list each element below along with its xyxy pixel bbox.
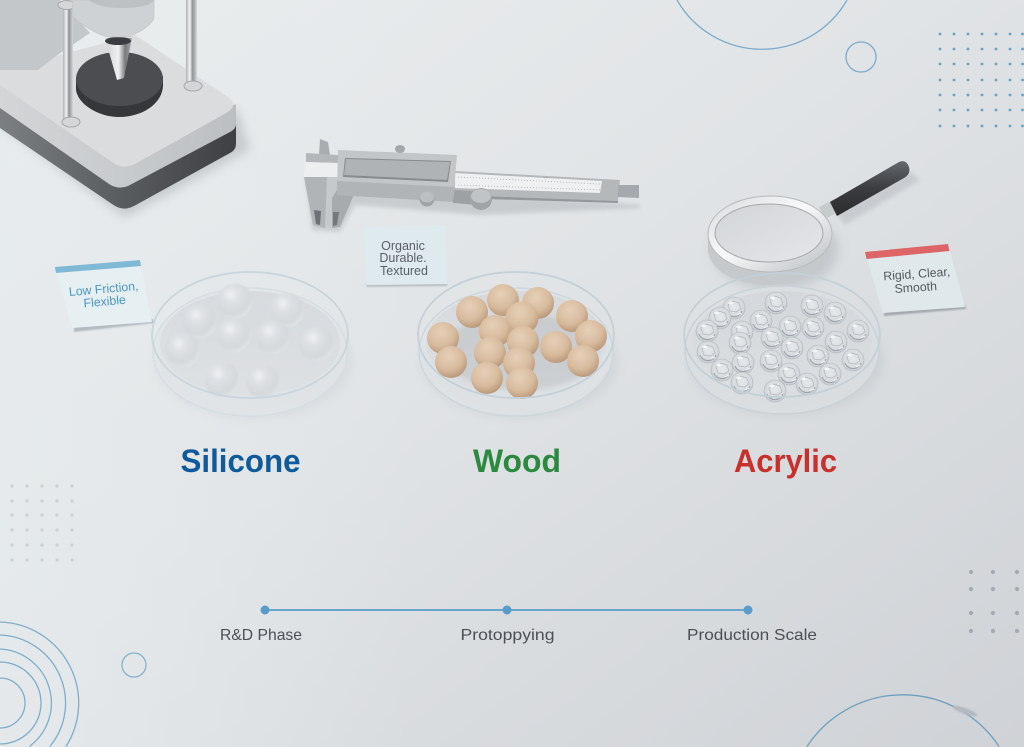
dish wall	[419, 288, 613, 416]
icon: digital caliper	[304, 139, 640, 232]
note text: Rigid, Clear,	[883, 265, 951, 283]
note text: wood traits: Durable.	[379, 251, 427, 265]
note text second line: Smooth	[894, 279, 938, 296]
dish floor	[692, 291, 872, 395]
acrylic beads	[696, 292, 869, 402]
timeline label: Production Scale: Production Scale	[687, 627, 817, 644]
note text second line: Flexible	[83, 293, 127, 310]
caliper body	[337, 150, 457, 202]
note text: wood traits: Organic	[381, 239, 425, 253]
note text: Low Friction,	[68, 279, 139, 299]
press disc	[76, 52, 163, 117]
timeline label: R&D Phase: R&D Phase	[220, 627, 302, 644]
panel: acrylic dish	[684, 273, 884, 416]
press base light side	[0, 85, 236, 188]
panel: wood dish	[418, 272, 618, 418]
dish rim	[418, 272, 614, 398]
decorative circle: small bottom left	[122, 653, 146, 677]
wood bead shadows	[442, 314, 598, 390]
heading: Wood: Wood	[473, 443, 561, 479]
dish floor	[426, 291, 606, 395]
caliper knobs	[395, 145, 492, 210]
heading: Acrylic: Acrylic	[734, 443, 837, 479]
timeline node: prototyping	[502, 606, 512, 614]
dish wall	[153, 288, 347, 416]
press cone	[105, 37, 132, 80]
timeline	[220, 606, 817, 644]
caliper rule	[453, 171, 639, 203]
concentric circles: bottom left	[0, 622, 79, 746]
panel: silicone dish	[152, 272, 352, 418]
timeline label: Protoppying: Protoppying	[460, 627, 554, 644]
dish floor	[160, 291, 340, 395]
press poles	[58, 0, 202, 127]
timeline line	[265, 609, 748, 611]
note: silicone	[55, 260, 154, 332]
note: acrylic	[865, 244, 966, 316]
dish rim	[684, 273, 880, 397]
wood beads	[427, 284, 607, 399]
dish rim	[152, 272, 348, 398]
heading: Silicone: Silicone	[180, 443, 300, 479]
press base dark layer	[0, 106, 236, 209]
note: wood	[364, 225, 447, 287]
magnifying glass	[708, 161, 920, 290]
note stripe: red	[865, 244, 950, 259]
caliper rail	[453, 190, 490, 206]
decorative circle: top arc	[677, 0, 847, 49]
timeline node: production	[744, 606, 752, 614]
note stripe: blue	[55, 260, 141, 273]
dot grid: top right	[939, 33, 1024, 127]
note text: wood traits: Textured	[380, 264, 428, 278]
dot grid: bottom right	[969, 570, 1019, 633]
dot grid: left	[10, 484, 74, 562]
caliper display	[343, 158, 451, 182]
decorative circle: small top	[846, 42, 876, 72]
magnifier ring	[708, 196, 832, 285]
decorative arc: bottom right	[807, 695, 999, 746]
silicone beads	[166, 284, 334, 399]
icon: testing press machine	[0, 0, 250, 218]
timeline node: R&D	[260, 606, 270, 614]
caliper fixed jaw	[304, 139, 356, 228]
magnifier handle	[819, 161, 909, 219]
press rear block	[0, 0, 90, 70]
dish wall	[685, 286, 879, 414]
press base top surface	[0, 35, 233, 167]
press head	[72, 0, 154, 37]
